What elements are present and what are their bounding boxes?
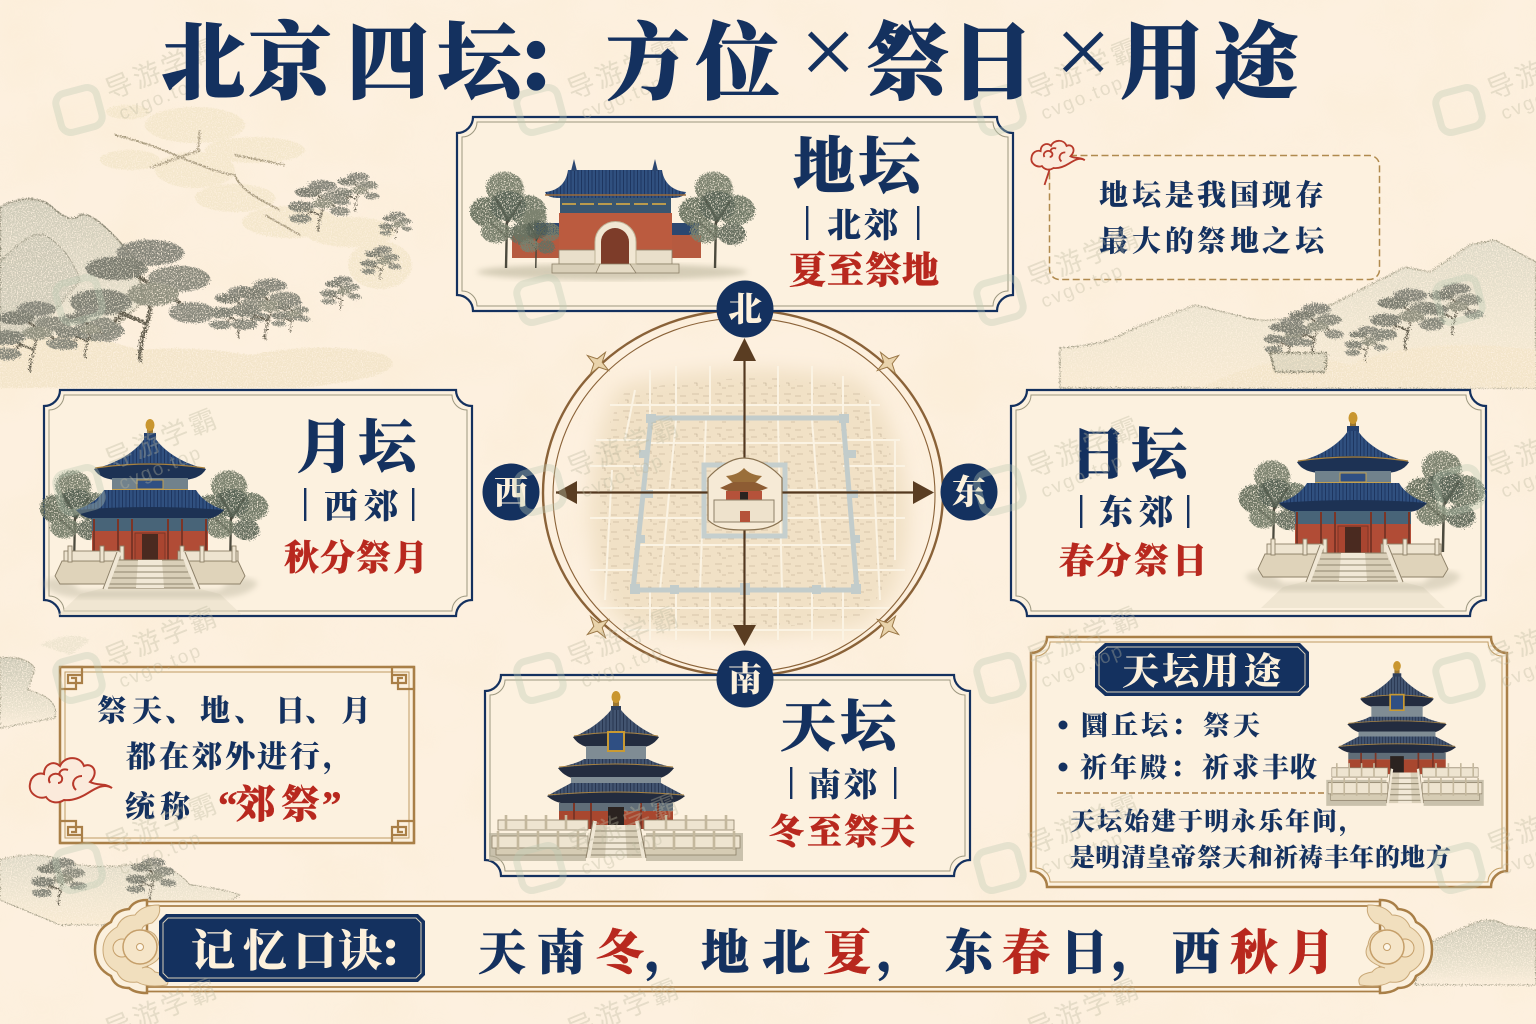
list: temple uses bbox=[1058, 711, 1317, 783]
scroll body bbox=[147, 900, 1380, 993]
note text: 地坛是我国现存 bbox=[1099, 179, 1324, 212]
mnemonic text: 春 bbox=[1002, 927, 1050, 980]
banner: mnemonic bbox=[95, 900, 1432, 993]
watermark: repeated site mark: 导游学霸 bbox=[101, 403, 224, 476]
title: 日坛: 日坛 bbox=[1070, 425, 1193, 487]
mnemonic text: 秋月 bbox=[1230, 927, 1335, 980]
direction badge: 东 bbox=[940, 464, 998, 520]
body text: 天坛始建于明永乐年间， bbox=[1070, 807, 1364, 837]
watermark: repeated site mark: 导游学霸 bbox=[563, 601, 686, 674]
illustration: 日坛 temple bbox=[1239, 412, 1485, 608]
direction badge: 南: 南 bbox=[728, 661, 762, 699]
watermark: repeated site mark: 导游学霸 bbox=[563, 411, 686, 484]
mnemonic text: ，东 bbox=[877, 927, 997, 982]
watermark: repeated site mark: cvgo.top bbox=[1038, 450, 1127, 503]
mnemonic text: ，地北 bbox=[645, 927, 810, 982]
subtitle: 北郊: 北郊 bbox=[827, 207, 898, 245]
panel frame bbox=[1031, 637, 1507, 887]
watermark: repeated site mark: cvgo.top bbox=[578, 72, 667, 125]
panel: 日坛 bbox=[1011, 390, 1486, 616]
landscape: right pines and altar bbox=[1264, 283, 1484, 372]
watermark: repeated site mark: 导游学霸 bbox=[1023, 601, 1146, 674]
subtitle: 北郊 bbox=[806, 206, 919, 245]
map: city wall bbox=[630, 414, 861, 595]
watermark: repeated site mark: cvgo.top bbox=[1038, 827, 1127, 880]
mnemonic text: 冬 bbox=[596, 927, 644, 980]
watermark: repeated site mark: cvgo.top bbox=[1038, 640, 1127, 693]
compass map bbox=[589, 366, 909, 640]
panel: 地坛 bbox=[457, 117, 1013, 311]
panel frame bbox=[1011, 390, 1486, 616]
title bbox=[161, 0, 1303, 111]
watermark: repeated site mark: 导游学霸 bbox=[101, 33, 224, 106]
note text: 祭天、地、日、月 bbox=[97, 695, 371, 728]
label plate bbox=[159, 914, 425, 982]
panel: 郊祭 note bbox=[30, 667, 414, 843]
highlight: 郊祭: “郊祭” bbox=[218, 784, 342, 827]
watermark: repeated site mark: cvgo.top bbox=[578, 640, 667, 693]
note text: 统称 bbox=[125, 791, 193, 824]
mnemonic text: 日，西 bbox=[1060, 927, 1220, 982]
watermark: repeated site mark: 导游学霸 bbox=[1023, 33, 1146, 106]
panel: 天坛用途 bbox=[1031, 637, 1507, 887]
ritual: 夏至祭地: 夏至祭地 bbox=[789, 250, 939, 292]
subtitle: 西郊: 西郊 bbox=[324, 488, 398, 526]
icon: red cloud bbox=[30, 758, 112, 802]
map: inner wall bbox=[704, 465, 785, 536]
watermark: repeated site mark: cvgo.top bbox=[1038, 72, 1127, 125]
note text: 最大的祭地之坛 bbox=[1099, 225, 1327, 258]
direction badge: 西: 西 bbox=[494, 474, 528, 512]
subtitle: 西郊 bbox=[304, 488, 414, 526]
direction badge: 东: 东 bbox=[952, 474, 989, 512]
mnemonic text: 夏 bbox=[823, 927, 871, 980]
illustration: 祈年殿 bbox=[1326, 661, 1484, 806]
subtitle: 东郊 bbox=[1080, 494, 1189, 532]
watermark: repeated site mark: 导游学霸 bbox=[101, 601, 224, 674]
mnemonic text bbox=[478, 927, 1335, 982]
direction badge: 南 bbox=[716, 650, 774, 708]
landscape: pine trees upper left bbox=[0, 173, 412, 372]
illustration: 地坛 gate bbox=[470, 159, 755, 280]
map: city plan base bbox=[589, 366, 909, 640]
watermark: repeated site mark: 导游学霸 bbox=[563, 788, 686, 861]
dashed divider bbox=[1057, 792, 1325, 794]
panel: 天坛 bbox=[485, 675, 970, 876]
label plate: 记忆口诀： bbox=[191, 927, 422, 976]
watermark: repeated site mark: cvgo.top bbox=[116, 72, 205, 125]
landscape: right mountains bbox=[1060, 240, 1536, 388]
watermark: repeated site mark: cvgo.top bbox=[116, 442, 205, 495]
panel frame bbox=[485, 675, 970, 876]
title: 天坛: 天坛 bbox=[780, 697, 902, 759]
title: 祭日 bbox=[866, 18, 1034, 111]
body text: 是明清皇帝祭天和祈祷丰年的地方 bbox=[1070, 843, 1451, 872]
watermark: repeated site mark: cvgo.top bbox=[116, 640, 205, 693]
direction badge: 北 bbox=[716, 280, 774, 338]
watermark: repeated site mark: cvgo.top bbox=[1038, 260, 1127, 313]
compass arrows bbox=[556, 338, 934, 646]
heading plate bbox=[1095, 643, 1309, 696]
heading plate: 天坛用途 bbox=[1122, 651, 1283, 693]
direction badge: 西 bbox=[482, 464, 540, 520]
landscape: lower left hills bbox=[0, 636, 240, 925]
title: 地坛: 地坛 bbox=[793, 134, 927, 202]
direction badge: 北: 北 bbox=[728, 292, 762, 329]
watermark: repeated site mark: 导游学霸 bbox=[1023, 411, 1146, 484]
title: 用途 bbox=[1120, 18, 1303, 111]
watermark: repeated site mark: 导游学霸 bbox=[1023, 221, 1146, 294]
scroll end: right bbox=[1359, 900, 1432, 993]
watermark: repeated site mark: 导游学霸 bbox=[101, 788, 224, 861]
frame with meander corners bbox=[60, 667, 414, 843]
ritual: 冬至祭天: 冬至祭天 bbox=[769, 813, 915, 852]
note: 地坛 fact bbox=[1031, 141, 1380, 280]
scroll end: left bbox=[95, 900, 168, 993]
subtitle: 东郊: 东郊 bbox=[1099, 494, 1173, 532]
watermark: repeated site mark: 导游学霸 bbox=[1023, 788, 1146, 861]
center temple medallion bbox=[708, 458, 782, 530]
landscape: bottom right hills bbox=[1415, 920, 1536, 985]
landscape: upper left mountains and pines bbox=[0, 105, 412, 388]
panel: 月坛 bbox=[40, 390, 472, 616]
mnemonic text: 天南 bbox=[478, 927, 585, 980]
compass stars bbox=[580, 345, 906, 645]
landscape: lower left pines bbox=[31, 858, 176, 905]
illustration: 天坛 temple bbox=[489, 691, 743, 861]
watermark: repeated site mark: cvgo.top bbox=[116, 827, 205, 880]
illustration: 月坛 temple bbox=[40, 419, 268, 615]
subtitle: 南郊: 南郊 bbox=[808, 767, 877, 804]
subtitle: 南郊 bbox=[790, 767, 896, 804]
icon: red cloud bbox=[1031, 141, 1085, 185]
panel frame bbox=[44, 390, 472, 616]
note text: 都在郊外进行， bbox=[126, 741, 353, 775]
watermark: repeated site mark: cvgo.top bbox=[578, 450, 667, 503]
list: temple uses: 祈年殿：祈求丰收 bbox=[1080, 752, 1317, 783]
ritual: 秋分祭月: 秋分祭月 bbox=[284, 539, 428, 578]
compass ring bbox=[543, 310, 943, 676]
title: 北京四坛：方位 bbox=[161, 17, 780, 111]
title: 月坛: 月坛 bbox=[296, 415, 422, 480]
panel frame bbox=[457, 117, 1013, 311]
watermark: repeated site mark: cvgo.top bbox=[578, 827, 667, 880]
list: temple uses: 圜丘坛：祭天 bbox=[1081, 711, 1260, 741]
ritual: 春分祭日: 春分祭日 bbox=[1059, 542, 1207, 581]
watermark: repeated site mark: 导游学霸 bbox=[563, 33, 686, 106]
